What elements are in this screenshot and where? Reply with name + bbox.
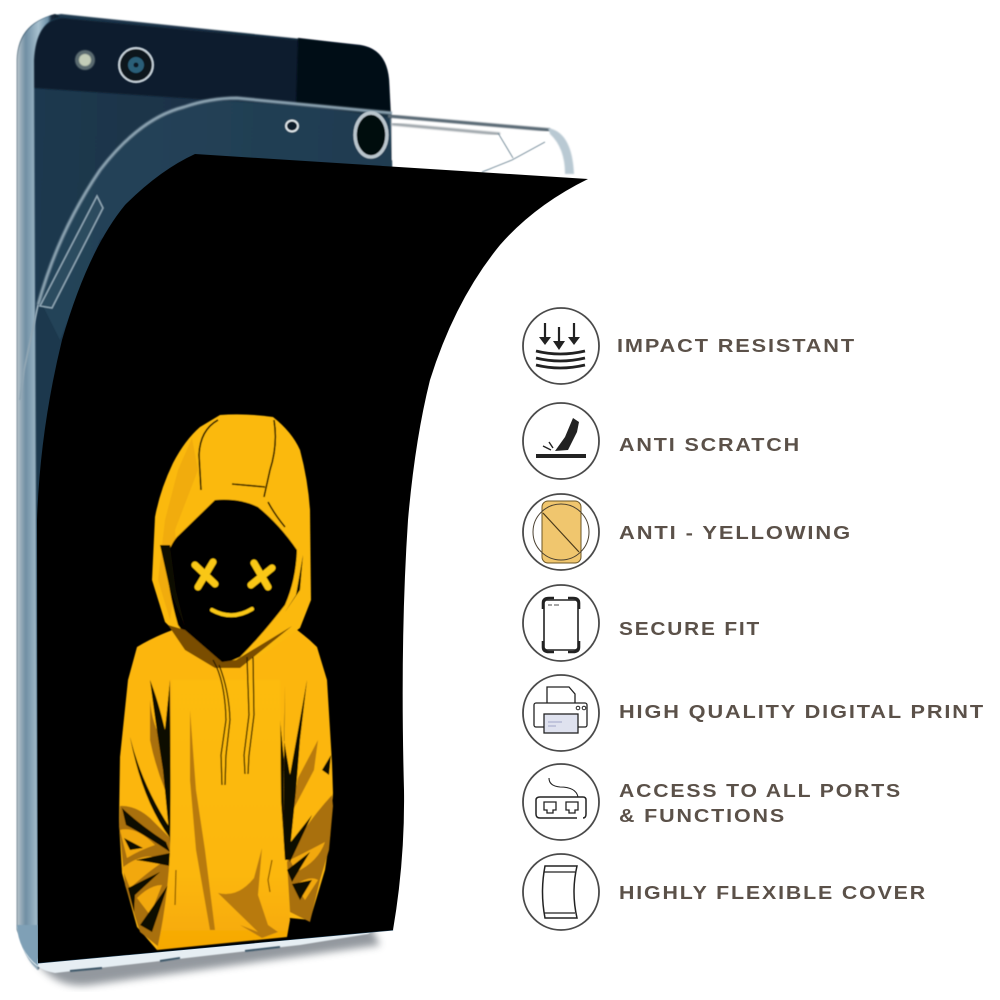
small case hole <box>286 120 298 132</box>
label: HIGHLY FLEXIBLE COVER <box>619 882 927 903</box>
clear case <box>20 98 574 400</box>
hood inner folds <box>168 625 292 668</box>
label: ANTI - YELLOWING <box>619 522 852 543</box>
feature: anti yellowing <box>523 494 852 570</box>
hood creases <box>199 420 285 527</box>
hoodie sleeves <box>119 625 333 950</box>
right sleeve folds <box>277 680 331 900</box>
icon: ports <box>523 764 599 840</box>
eyes and smile <box>195 562 272 615</box>
face shadow <box>166 500 297 664</box>
label: ANTI SCRATCH <box>619 434 801 455</box>
feature: flexible cover <box>523 854 927 930</box>
camera cutout <box>355 113 387 157</box>
label: & FUNCTIONS <box>619 805 786 826</box>
label: ACCESS TO ALL PORTS <box>619 780 902 801</box>
drawstrings <box>213 657 254 785</box>
icon: flexible sheet <box>523 854 599 930</box>
feature: anti scratch <box>523 403 801 479</box>
black artwork sheet <box>37 154 588 963</box>
camera lens <box>119 48 153 82</box>
torso creases <box>190 710 215 930</box>
label: SECURE FIT <box>619 618 761 639</box>
label <box>619 780 902 826</box>
icon: yellowed case <box>523 494 599 570</box>
feature: high quality digital print <box>523 675 985 751</box>
side button outline <box>40 196 103 308</box>
icon: printer <box>523 675 599 751</box>
case bottom edge <box>17 925 393 986</box>
phone back <box>17 14 392 970</box>
hoodie torso <box>157 680 290 950</box>
label: IMPACT RESISTANT <box>617 335 856 356</box>
icon: impact <box>523 308 599 384</box>
icon: phone with bumpers <box>523 585 599 661</box>
label: HIGH QUALITY DIGITAL PRINT <box>619 701 985 722</box>
right sleeve shading <box>287 795 333 922</box>
icon: scratch blade <box>523 403 599 479</box>
feature: secure fit <box>523 585 761 661</box>
feature: impact resistant <box>523 308 856 384</box>
phone side rim <box>17 14 60 970</box>
left sleeve folds <box>122 680 171 932</box>
hooded figure illustration <box>119 414 333 950</box>
flash <box>75 50 95 70</box>
left sleeve shading <box>119 806 170 948</box>
hood <box>152 414 311 668</box>
feature: access to ports <box>523 764 902 840</box>
